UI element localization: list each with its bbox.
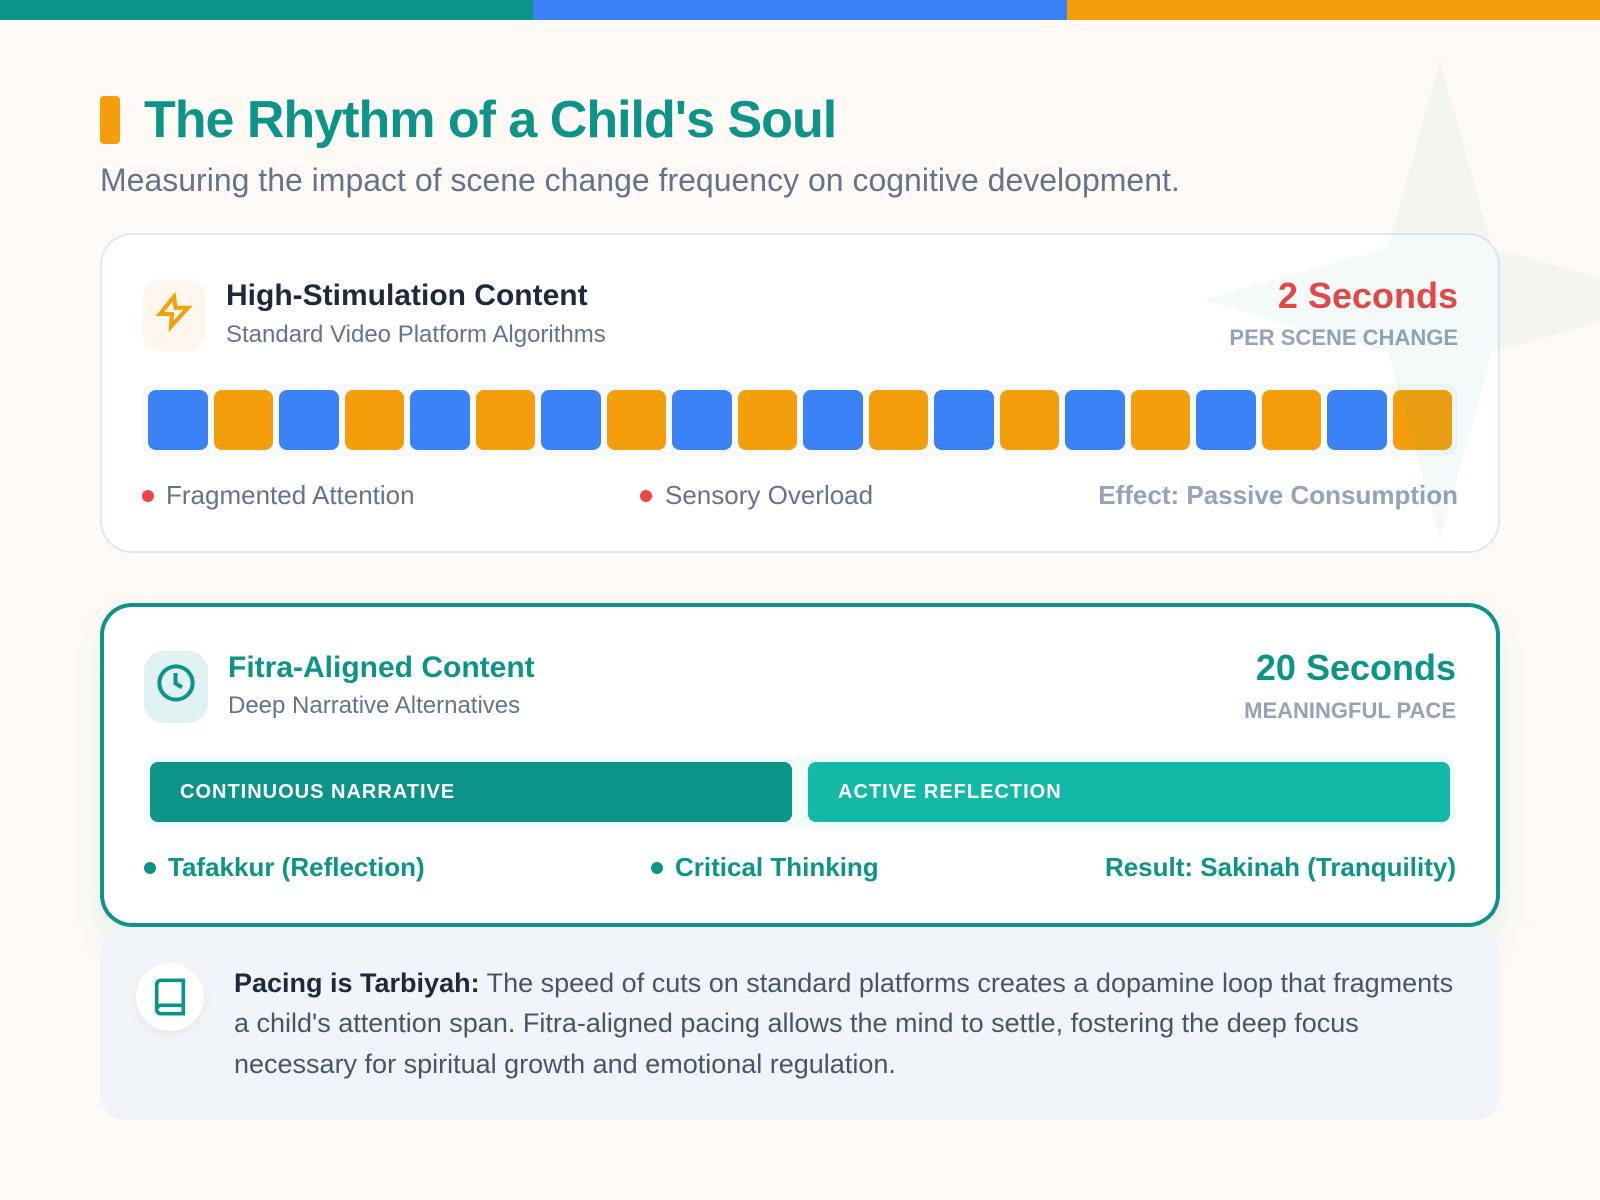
segment: active reflection: ACTIVE REFLECTION: [838, 781, 1062, 803]
heading: high-stimulation content: High-Stimulation Content: [226, 279, 588, 312]
stat label: meaningful pace: MEANINGFUL PACE: [1244, 698, 1456, 723]
timeline: rapid scene blocks: [142, 384, 1458, 456]
stat: 20 seconds: 20 Seconds: [1256, 647, 1456, 688]
icon: lightning bolt: [142, 279, 206, 351]
stat label: per scene change: PER SCENE CHANGE: [1229, 325, 1458, 350]
effect: passive consumption: Effect: Passive Consumption: [1098, 480, 1458, 510]
heading: fitra-aligned content: Fitra-Aligned Content: [228, 651, 535, 684]
segment: continuous narrative: CONTINUOUS NARRATIVE: [180, 781, 455, 803]
title accent bar: [100, 96, 120, 144]
top colour bar: [0, 0, 1600, 20]
bullet: tafakkur: Tafakkur (Reflection): [168, 852, 425, 882]
panel: high-stimulation content: [100, 233, 1500, 553]
decorative star: [1204, 61, 1600, 539]
bullet: fragmented attention: Fragmented Attention: [166, 480, 415, 510]
segment: continuous narrative: [150, 762, 792, 822]
result: sakinah: Result: Sakinah (Tranquility): [1105, 852, 1456, 882]
description: platform algorithms: Standard Video Platform Algorithms: [226, 321, 606, 348]
note text: Pacing is Tarbiyah: The speed of cuts on standard platforms creates a dopamine loop that fragments: [234, 968, 1453, 998]
segment: active reflection: [808, 762, 1450, 822]
bullet: sensory overload: Sensory Overload: [665, 480, 873, 510]
note text: a child's attention span. Fitra-aligned pacing allows the mind to settle, fostering the deep focus: [234, 1008, 1359, 1038]
icon: book: [136, 963, 204, 1031]
bullet: critical thinking: Critical Thinking: [675, 852, 879, 882]
note text: [234, 968, 1453, 1079]
timeline: long narrative segments: [144, 756, 1456, 828]
panel: pacing note: [100, 927, 1500, 1120]
icon: clock: [144, 651, 208, 723]
subtitle: Measuring the impact of scene change frequency on cognitive development.: [100, 162, 1180, 198]
stat: 2 seconds: 2 Seconds: [1278, 275, 1458, 316]
note text: necessary for spiritual growth and emotional regulation.: [234, 1049, 896, 1079]
description: deep narrative alternatives: Deep Narrative Alternatives: [228, 692, 520, 719]
panel: fitra-aligned content: [100, 603, 1500, 927]
title: The Rhythm of a Child's Soul: [144, 91, 836, 149]
